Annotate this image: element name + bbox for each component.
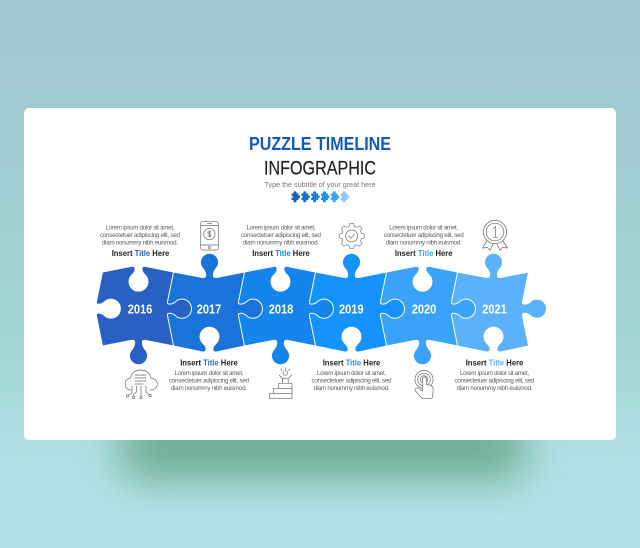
text block: 2018: Lorem ipsum dolor sit amet,	[246, 224, 316, 232]
puzzle piece 2017	[167, 253, 262, 352]
icon: person on stairs	[269, 368, 292, 398]
text block: 2021: Insert Title Here	[466, 358, 524, 368]
text block: 2016	[100, 224, 181, 258]
text block: 2018: consectetuer adipiscing elit, sed	[241, 232, 322, 239]
text block: 2017: consectetuer adipiscing elit, sed	[169, 378, 250, 384]
text block: 2021: Lorem ipsum dolor sit amet,	[460, 370, 529, 377]
text block: 2017	[169, 358, 250, 392]
text block: 2018: diam nonummy nibh euismod.	[243, 240, 319, 246]
year labels: 2021	[482, 302, 507, 316]
text block: 2018: Insert Title Here	[252, 248, 310, 258]
text block: 2021: consectetuer adipiscing elit, sed	[454, 378, 535, 384]
text block: 2016: Lorem ipsum dolor sit amet,	[106, 224, 175, 232]
puzzle piece 2016	[96, 266, 191, 365]
text block: 2021	[454, 358, 535, 392]
puzzle piece 2018	[238, 266, 333, 365]
year labels: 2020	[412, 302, 436, 316]
year labels: 2019	[339, 302, 364, 316]
text block: 2020: consectetuer adipiscing elit, sed	[384, 232, 464, 239]
icon: medal number one	[482, 220, 508, 250]
text block: 2016: consectetuer adipiscing elit, sed	[100, 232, 181, 239]
puzzle piece 2020	[380, 266, 475, 365]
puzzle timeline	[96, 253, 546, 365]
text block: 2020: Lorem ipsum dolor sit amet,	[389, 224, 458, 232]
icon: smartphone with dollar	[201, 222, 218, 250]
icon: mini puzzle row	[290, 191, 349, 202]
year labels: 2017	[197, 302, 221, 316]
icon: touch finger	[415, 370, 433, 398]
year labels	[128, 302, 507, 316]
text block: 2016: diam nonummy nibh euismod.	[102, 240, 178, 246]
icon: cloud network	[125, 370, 158, 399]
card shadow	[120, 415, 525, 480]
subtitle: Type the subtitle of your great here	[264, 180, 376, 189]
text block: 2020	[384, 224, 464, 258]
year labels: 2016	[128, 302, 152, 316]
icon: gear with check	[339, 223, 364, 248]
text block: 2017: diam nonummy nibh euismod.	[171, 385, 247, 392]
text block: 2019: diam nonummy nibh euismod.	[314, 385, 390, 392]
puzzle piece 2019	[309, 253, 404, 352]
text block: 2019	[312, 358, 392, 392]
text block: 2021: diam nonummy nibh euismod.	[456, 385, 533, 392]
title: PUZZLE TIMELINE	[249, 134, 391, 154]
text block: 2020: diam nonummy nibh euismod.	[386, 240, 462, 246]
title	[249, 134, 391, 180]
text block: 2019: Lorem ipsum dolor sit amet,	[317, 370, 386, 377]
text block: 2016: Insert Title Here	[112, 248, 170, 258]
year labels: 2018	[269, 302, 293, 316]
text block: 2020: Insert Title Here	[395, 248, 453, 258]
text block: 2018	[241, 224, 322, 258]
panel: white card	[24, 108, 616, 440]
text block: 2017: Insert Title Here	[180, 358, 238, 368]
title: INFOGRAPHIC	[264, 158, 376, 180]
text block: 2019: Insert Title Here	[323, 358, 381, 368]
text block: 2017: Lorem ipsum dolor sit amet,	[174, 370, 244, 377]
puzzle piece 2021	[451, 253, 546, 352]
text block: 2019: consectetuer adipiscing elit, sed	[312, 378, 392, 384]
